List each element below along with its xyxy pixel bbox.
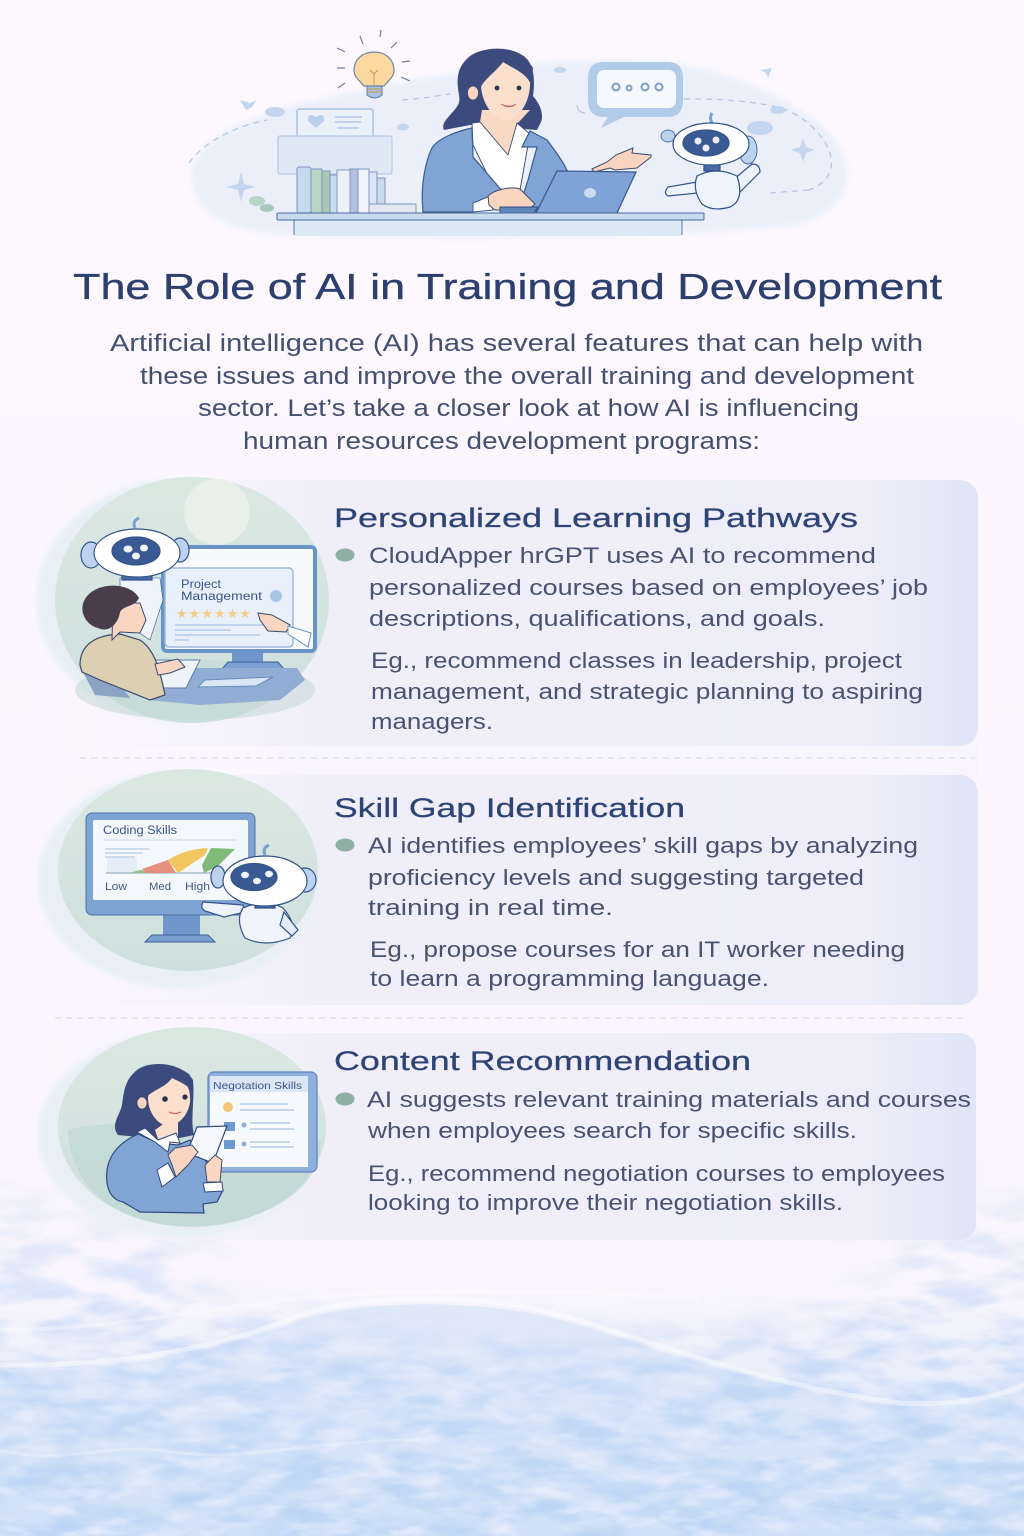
bullet text: proficiency levels and suggesting targeted — [368, 865, 864, 890]
intro paragraph: Artificial intelligence (AI) has several features that can help with — [110, 330, 923, 357]
intro paragraph: human resources development programs: — [243, 428, 760, 455]
monitor — [163, 547, 315, 669]
hands — [168, 1145, 198, 1177]
example text — [370, 937, 905, 991]
tablet — [187, 1126, 227, 1163]
speech bubble — [577, 62, 683, 128]
bullet text: descriptions, qualifications, and goals. — [369, 606, 825, 631]
woman — [422, 49, 651, 212]
skills card — [208, 1072, 317, 1172]
typing hand — [488, 188, 535, 210]
course card text: Project — [181, 579, 222, 591]
desk — [277, 213, 704, 236]
sparkles and clouds — [226, 67, 815, 212]
watercolor waves at the bottom — [0, 1188, 1024, 1536]
bullet text: training in real time. — [368, 895, 613, 920]
panel: personalized learning pathways — [36, 477, 978, 746]
pointing hand — [258, 613, 290, 632]
intro paragraph: these issues and improve the overall training and development — [140, 363, 914, 390]
hero illustration: woman at desk with robot — [189, 30, 847, 237]
intro paragraph — [110, 330, 923, 455]
face — [148, 1077, 190, 1126]
robot — [202, 845, 316, 943]
bullet text: AI suggests relevant training materials and courses — [367, 1087, 971, 1112]
hero background wash — [192, 60, 847, 237]
bullet — [336, 1092, 354, 1106]
example text: managers. — [371, 709, 493, 734]
monitor with chart: Med — [149, 881, 171, 893]
desk and laptop — [150, 660, 305, 705]
panel background — [40, 775, 978, 1005]
panel: skill gap identification — [38, 769, 978, 1005]
icon: document and tray — [278, 109, 392, 174]
heading: Skill Gap Identification — [334, 793, 685, 823]
shirt — [472, 122, 530, 190]
dashed connecting arcs — [189, 94, 831, 193]
bullet text: when employees search for specific skills. — [367, 1118, 857, 1143]
laptop — [500, 171, 636, 213]
panel background — [40, 1033, 976, 1240]
illustration: woman with tablet — [38, 1027, 326, 1237]
icon: light bulb — [337, 30, 410, 98]
monitor with chart: Low — [105, 881, 127, 893]
icon: row of books — [297, 167, 416, 213]
example text: looking to improve their negotiation skills. — [368, 1190, 843, 1215]
title: The Role of AI in Training and Development — [73, 266, 942, 307]
heading: Content Recommendation — [334, 1046, 751, 1076]
robot — [81, 518, 189, 640]
bullet — [336, 838, 354, 852]
monitor with chart: High — [185, 881, 210, 893]
woman with tablet — [107, 1064, 227, 1213]
panel: content recommendation — [38, 1027, 976, 1240]
example text — [371, 648, 923, 734]
fringe — [475, 55, 533, 92]
bullet text: personalized courses based on employees’ job — [369, 575, 928, 600]
face — [481, 62, 530, 120]
bullet text: CloudApper hrGPT uses AI to recommend — [369, 543, 876, 568]
panel background — [40, 480, 978, 746]
intro paragraph: sector. Let’s take a closer look at how AI is influencing — [198, 395, 859, 422]
heading: Personalized Learning Pathways — [334, 503, 858, 533]
monitor with chart: Coding Skills — [103, 825, 177, 837]
hair — [115, 1064, 194, 1140]
neck — [480, 110, 530, 155]
example text: Eg., recommend negotiation courses to employees — [368, 1161, 945, 1186]
example text: to learn a programming language. — [370, 966, 769, 991]
bullet — [336, 548, 354, 562]
monitor with chart — [86, 813, 255, 942]
man at computer — [80, 586, 185, 700]
illustration: robot with skills chart — [38, 769, 318, 988]
example text: Eg., recommend classes in leadership, project — [371, 648, 902, 673]
bullet text: AI identifies employees’ skill gaps by analyzing — [368, 833, 918, 858]
monitor: ★★★★★★ — [176, 606, 252, 621]
bullet text — [368, 833, 918, 920]
blazer left — [422, 128, 503, 212]
illustration: robot recommending a course — [36, 477, 329, 723]
hair — [443, 49, 542, 130]
example text — [368, 1161, 945, 1215]
monitor: Management — [181, 591, 263, 603]
example text: management, and strategic planning to aspiring — [371, 679, 923, 704]
skills card: Negotation Skills — [213, 1080, 302, 1092]
robot — [661, 113, 760, 209]
bullet text — [369, 543, 928, 631]
example text: Eg., propose courses for an IT worker needing — [370, 937, 905, 962]
blazer right — [520, 131, 568, 212]
collar — [137, 1128, 180, 1152]
bullet text — [367, 1087, 971, 1143]
sweater — [107, 1134, 223, 1213]
pointing hand — [592, 148, 651, 172]
